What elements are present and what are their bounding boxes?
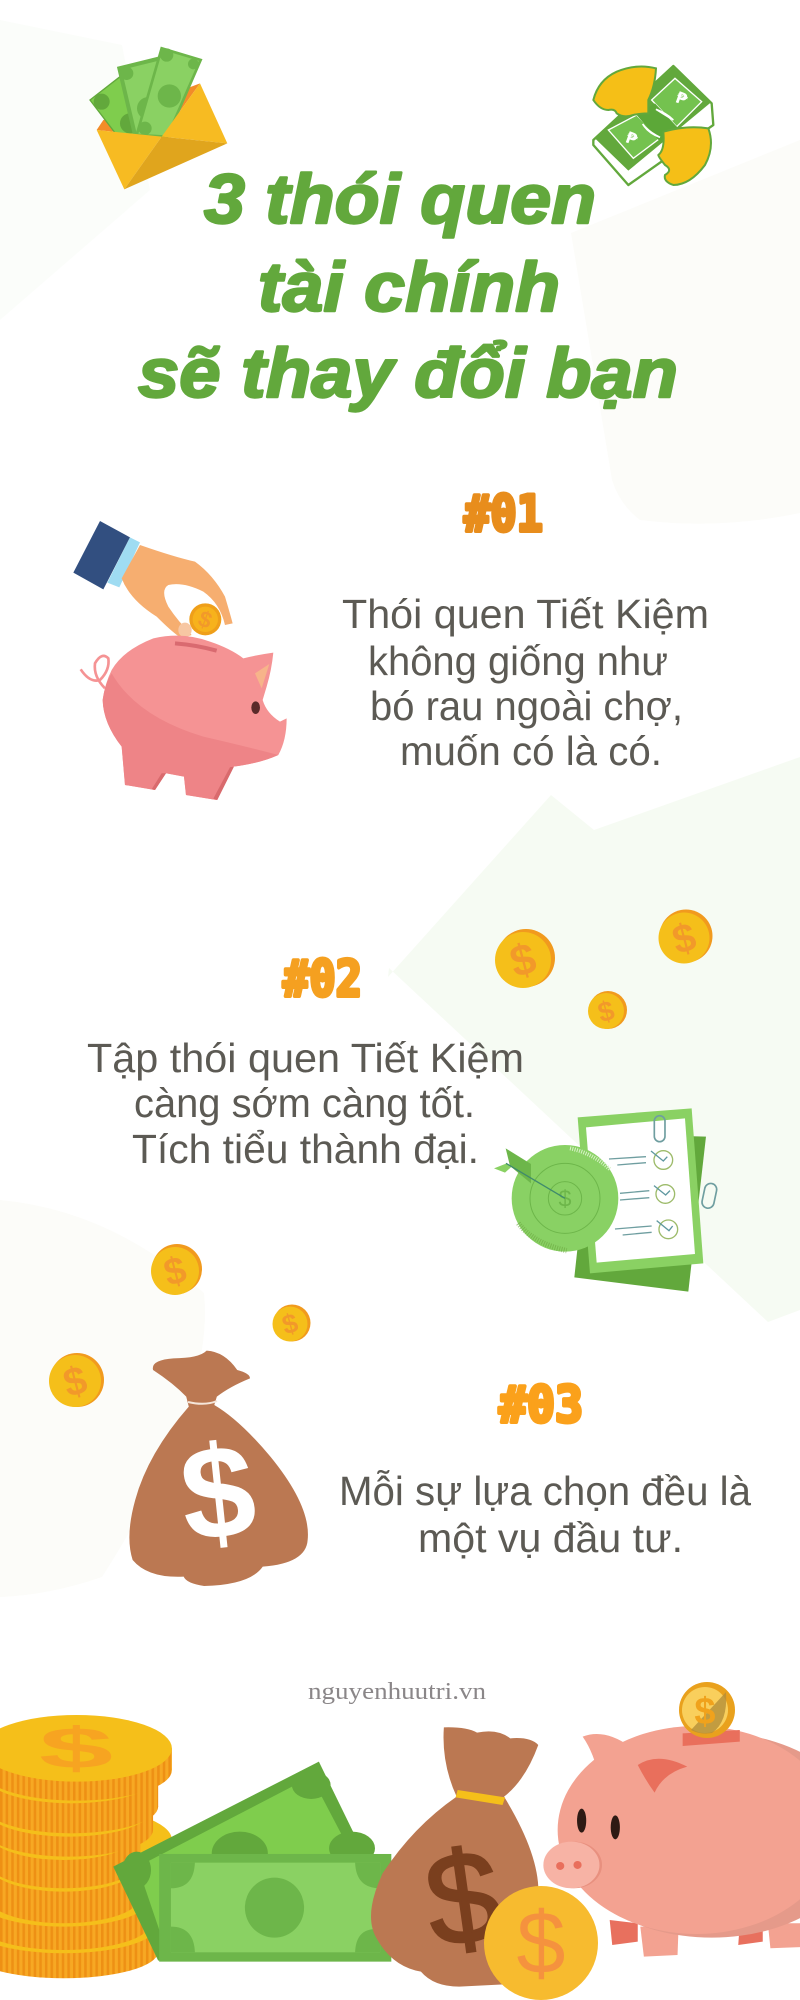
heading: #03: #03	[499, 1376, 583, 1434]
text block: habit 1	[342, 591, 709, 774]
icon: money bag	[129, 1351, 308, 1586]
title: sẽ thay đổi bạn	[138, 334, 678, 412]
title	[138, 160, 678, 412]
text block: habit 3: một vụ đầu tư.	[418, 1515, 683, 1561]
icon: hand dropping coin into piggy bank: $	[195, 605, 216, 634]
icon: money bag: $	[174, 1416, 262, 1569]
heading: #01: #01	[464, 485, 543, 543]
text block: habit 2: Tích tiểu thành đại.	[132, 1126, 479, 1172]
text block: habit 1: không giống như	[368, 638, 668, 684]
text block: habit 2: càng sớm càng tốt.	[134, 1080, 475, 1126]
coin: $	[668, 915, 701, 963]
icon: piggy bank with coin: $	[694, 1691, 716, 1733]
icon: front gold coin	[484, 1886, 598, 2000]
background shape: top left faint note	[0, 20, 150, 320]
text block: habit 3: Mỗi sự lựa chọn đều là	[339, 1468, 751, 1514]
text block: habit 2	[87, 1035, 524, 1172]
coin	[272, 1304, 310, 1342]
footer website: nguyenhuutri.vn	[308, 1679, 486, 1705]
coin: $	[595, 994, 618, 1028]
coin	[658, 910, 712, 964]
icon: hand dropping coin into piggy bank	[73, 521, 287, 800]
coin	[49, 1353, 104, 1407]
icon: target with checklist	[494, 1108, 718, 1292]
coin: $	[160, 1249, 191, 1295]
text block: habit 1: muốn có là có.	[400, 728, 662, 774]
background shape: top right faint note	[571, 140, 800, 524]
text block: habit 1: Thói quen Tiết Kiệm	[342, 591, 709, 637]
text block: habit 3	[339, 1468, 751, 1561]
heading: #02: #02	[283, 950, 362, 1008]
icon: green banknotes	[113, 1762, 393, 1962]
coin: $	[279, 1308, 301, 1340]
background shape: lower left faint blob	[0, 1200, 205, 1597]
coin	[588, 991, 627, 1029]
icon: stack of gold coins	[0, 1715, 172, 1978]
icon: money with wings: ₱	[673, 88, 691, 110]
icon: target with checklist: $	[559, 1186, 572, 1212]
icon: piggy bank with coin	[543, 1682, 800, 1957]
title: 3 thói quen	[204, 160, 596, 238]
icon: brown money bag	[371, 1727, 538, 1987]
icon: stack of gold coins: $	[39, 1716, 113, 1780]
coin	[151, 1244, 202, 1295]
icon: brown money bag: $	[417, 1821, 509, 1975]
background shape: large pale green banknote	[388, 757, 800, 1322]
coin: $	[505, 934, 541, 987]
icon: front gold coin: $	[517, 1893, 565, 1992]
icon: envelope with banknotes	[90, 48, 227, 189]
title: tài chính	[258, 248, 560, 326]
text block: habit 2: Tập thói quen Tiết Kiệm	[87, 1035, 524, 1081]
text block: habit 1: bó rau ngoài chợ,	[370, 683, 683, 729]
coin: $	[59, 1358, 92, 1406]
icon: money with wings: ₱	[623, 128, 641, 150]
coin	[495, 929, 555, 988]
icon: money with wings	[593, 66, 713, 185]
